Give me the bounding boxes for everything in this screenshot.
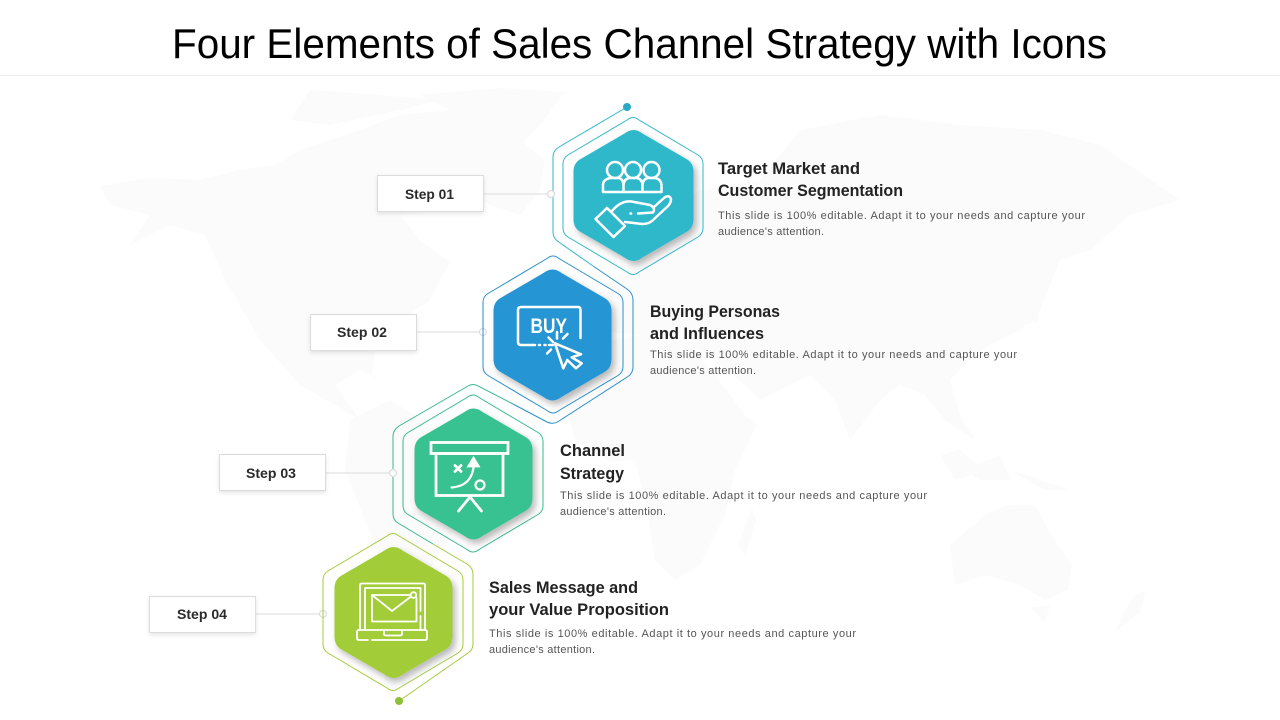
text: target market: Target Market and (718, 160, 860, 178)
hexagon 4 fill (334, 547, 452, 678)
step 4 label: Step 04 (177, 606, 227, 622)
text: channel strategy: Strategy (560, 465, 625, 483)
text: sales message (489, 579, 856, 656)
step 1 label (378, 176, 484, 212)
text: target market: This slide is 100% editable. Adapt it to your needs and capture your (718, 210, 1085, 222)
text: buying personas: This slide is 100% editable. Adapt it to your needs and capture your (650, 349, 1017, 361)
step 3 label: Step 03 (246, 465, 296, 481)
step 4 connector (256, 610, 326, 618)
text: buying personas: audience's attention. (650, 365, 756, 377)
icon: buy button with cursor: BUY (530, 315, 567, 338)
background world map (100, 88, 1180, 690)
text: target market: Customer Segmentation (718, 182, 903, 200)
text: sales message: Sales Message and (489, 579, 638, 597)
step 1 connector (484, 190, 554, 198)
step 2 connector (417, 328, 486, 336)
text: sales message: This slide is 100% editable. Adapt it to your needs and capture your (489, 628, 856, 640)
hexagon 1 fill (574, 130, 694, 261)
icon: buy button with cursor (518, 307, 582, 368)
step 3 connector (326, 470, 396, 476)
serpentine connector line (393, 107, 633, 701)
text: sales message: audience's attention. (489, 644, 595, 656)
step 4 label (150, 596, 256, 632)
text: buying personas: and Influences (650, 325, 764, 343)
icon: presentation board with strategy (431, 442, 508, 511)
step 2 label: Step 02 (337, 324, 387, 340)
text: target market: audience's attention. (718, 226, 824, 238)
hexagon 2 outline (483, 256, 623, 413)
text: channel strategy: This slide is 100% editable. Adapt it to your needs and capture your (560, 490, 927, 502)
step 1 label: Step 01 (405, 186, 454, 202)
step 3 label (220, 454, 326, 490)
text: target market (718, 160, 1085, 238)
hexagon 2 fill (494, 270, 612, 400)
hexagon 3 fill (414, 408, 532, 540)
text: sales message: your Value Proposition (489, 601, 669, 619)
icon: people on hand (596, 162, 671, 237)
end dot (395, 697, 403, 705)
text: channel strategy (560, 442, 927, 518)
start dot (623, 103, 631, 111)
panel: step 1 (378, 118, 1085, 274)
panel: step 4 (150, 534, 856, 690)
title: Four Elements of Sales Channel Strategy with Icons (172, 20, 1107, 67)
text: channel strategy: audience's attention. (560, 506, 666, 518)
panel: step 3 (220, 395, 927, 552)
text: buying personas: Buying Personas (650, 303, 780, 321)
panel: step 2 (310, 256, 1017, 413)
icon: laptop with email (357, 584, 427, 640)
text: channel strategy: Channel (560, 442, 625, 460)
hexagon 4 outline (323, 534, 463, 690)
hexagon 1 outline (563, 118, 703, 274)
text: buying personas (650, 303, 1017, 377)
hexagon 3 outline (403, 395, 543, 552)
step 2 label (310, 314, 416, 350)
